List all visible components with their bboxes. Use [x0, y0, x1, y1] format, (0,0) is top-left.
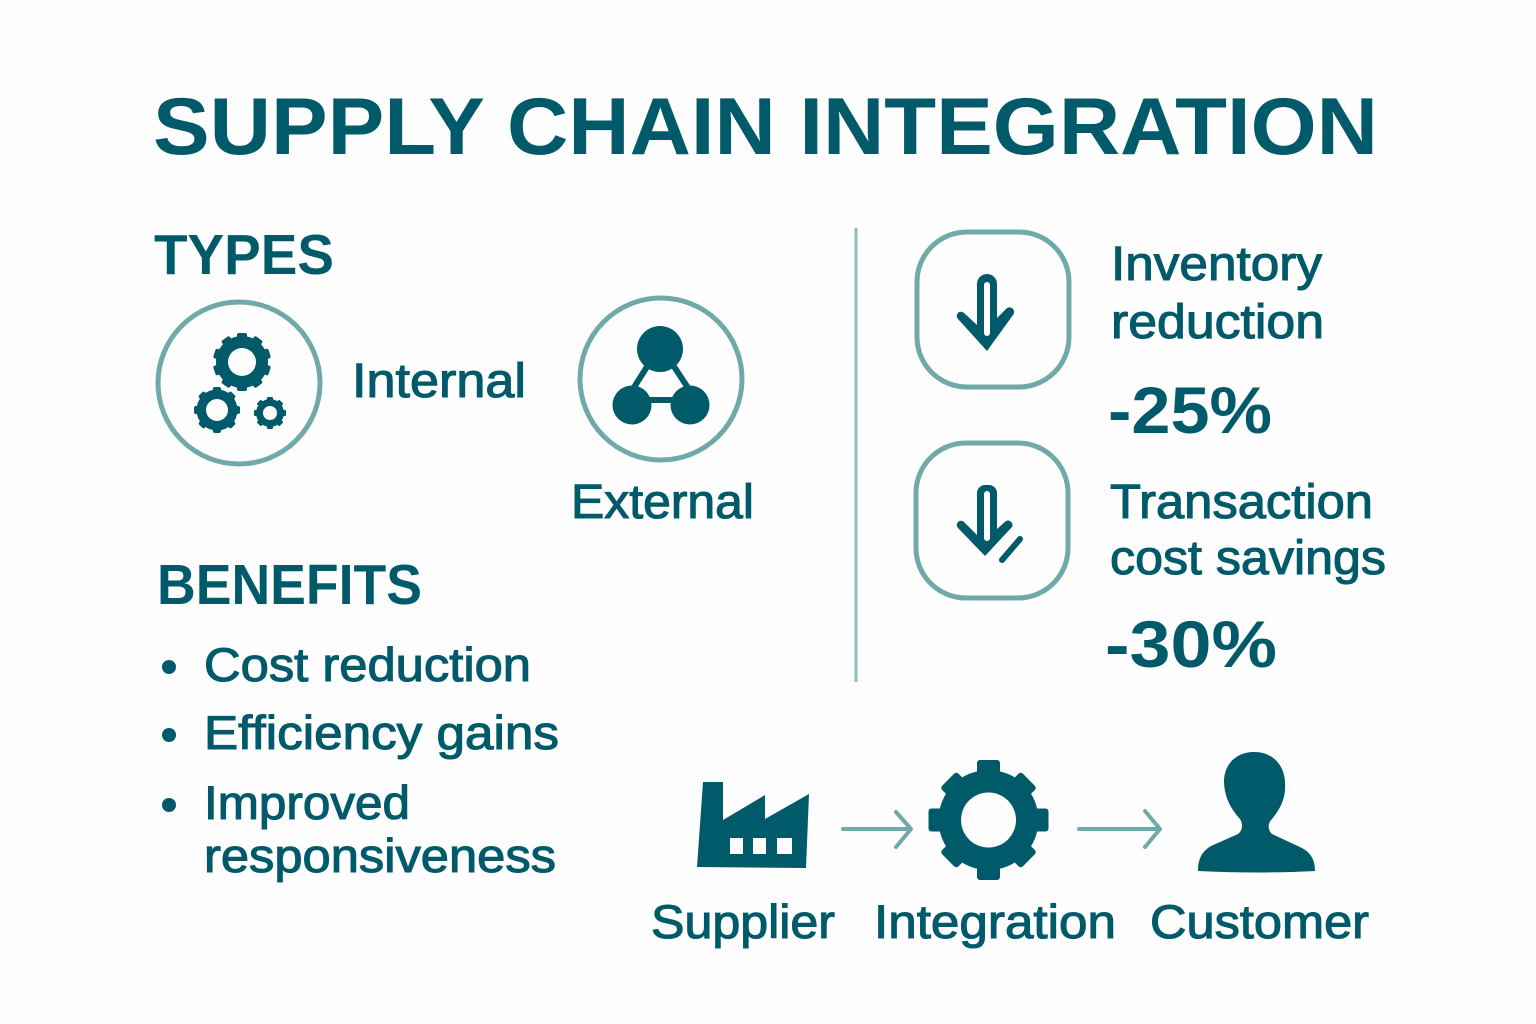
icon: factory [697, 782, 809, 868]
label: integration: Integration [874, 895, 1116, 948]
icon: internal gears [158, 302, 320, 464]
icon: external network [580, 298, 742, 460]
bullet: cost reduction: Cost reduction [204, 638, 531, 691]
panel: benefits [157, 553, 559, 882]
title: SUPPLY CHAIN INTEGRATION [153, 82, 1378, 172]
bullet: efficiency gains: Efficiency gains [204, 706, 559, 759]
panel: inventory reduction metric [917, 232, 1324, 447]
label: supplier: Supplier [651, 895, 835, 948]
bullet: improved responsiveness: responsiveness [204, 829, 556, 882]
label: transaction cost savings [1110, 476, 1386, 585]
label: inventory reduction: Inventory [1111, 238, 1322, 291]
arrow: integration to customer [1079, 811, 1160, 847]
label: transaction cost savings: Transaction [1110, 476, 1373, 529]
label: customer: Customer [1150, 895, 1369, 948]
value: -30%: -30% [1105, 607, 1277, 681]
label: internal: Internal [352, 355, 526, 408]
icon: down arrow with dash [916, 443, 1068, 598]
label: inventory reduction: reduction [1111, 296, 1324, 349]
label: transaction cost savings: cost savings [1110, 532, 1386, 585]
panel: transaction cost metric [916, 443, 1386, 681]
panel: supply chain flow [651, 752, 1369, 948]
heading: benefits: BENEFITS [157, 553, 422, 617]
heading: types: TYPES [154, 223, 334, 287]
icon: customer person [1198, 752, 1315, 872]
panel: types [154, 223, 754, 529]
arrow: supplier to integration [843, 812, 911, 847]
label: inventory reduction [1111, 238, 1324, 349]
value: -25%: -25% [1108, 373, 1272, 447]
label: external: External [571, 476, 754, 529]
bullet: improved responsiveness: Improved [204, 776, 410, 829]
icon: down arrow [917, 232, 1069, 387]
bullet: improved responsiveness [162, 776, 556, 882]
icon: integration gear [928, 760, 1048, 880]
